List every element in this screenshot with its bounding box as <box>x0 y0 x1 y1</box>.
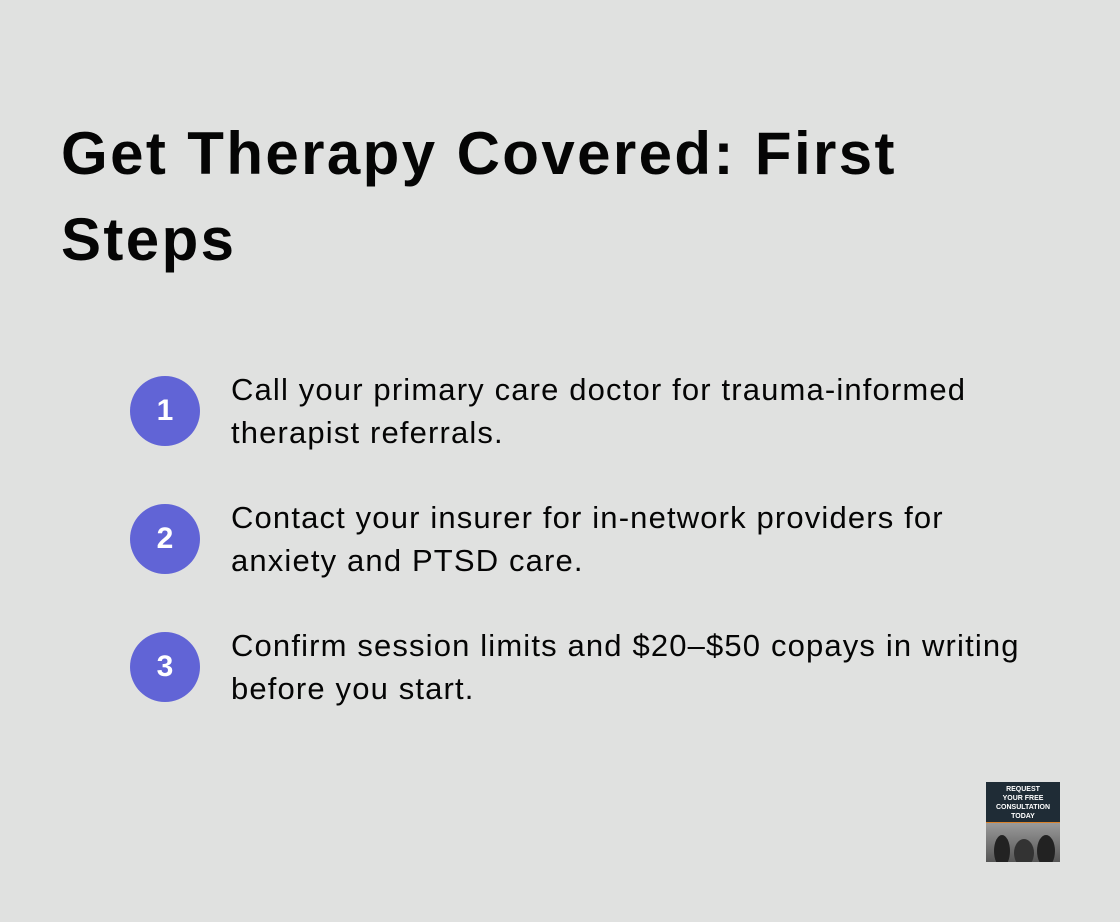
step 1 text: Call your primary care doctor for trauma-informed <box>231 372 966 407</box>
step 2 text <box>231 500 944 578</box>
consultation badge: REQUEST <box>1006 786 1040 793</box>
title: Get Therapy Covered: First <box>61 120 897 187</box>
step 1 text <box>231 372 966 450</box>
step 3 text <box>231 628 1020 706</box>
step 2 <box>130 500 944 578</box>
title: Steps <box>61 206 236 273</box>
number badge 1 <box>130 376 200 446</box>
step 2 text: Contact your insurer for in-network providers for <box>231 500 944 535</box>
number badge 2: 2 <box>157 522 173 555</box>
consultation badge: CONSULTATION <box>996 804 1050 811</box>
number badge 2 <box>130 504 200 574</box>
consultation badge: TODAY <box>1011 813 1035 820</box>
step 3 <box>130 628 1020 706</box>
title <box>61 120 897 273</box>
step 1 text: therapist referrals. <box>231 415 504 450</box>
step 3 text: before you start. <box>231 671 475 706</box>
consultation badge: YOUR FREE <box>1003 795 1043 802</box>
step 1 <box>130 372 966 450</box>
number badge 3: 3 <box>157 650 173 683</box>
number badge 1: 1 <box>157 394 173 427</box>
step 2 text: anxiety and PTSD care. <box>231 543 584 578</box>
consultation badge <box>986 782 1060 862</box>
step 3 text: Confirm session limits and $20–$50 copays in writing <box>231 628 1020 663</box>
number badge 3 <box>130 632 200 702</box>
